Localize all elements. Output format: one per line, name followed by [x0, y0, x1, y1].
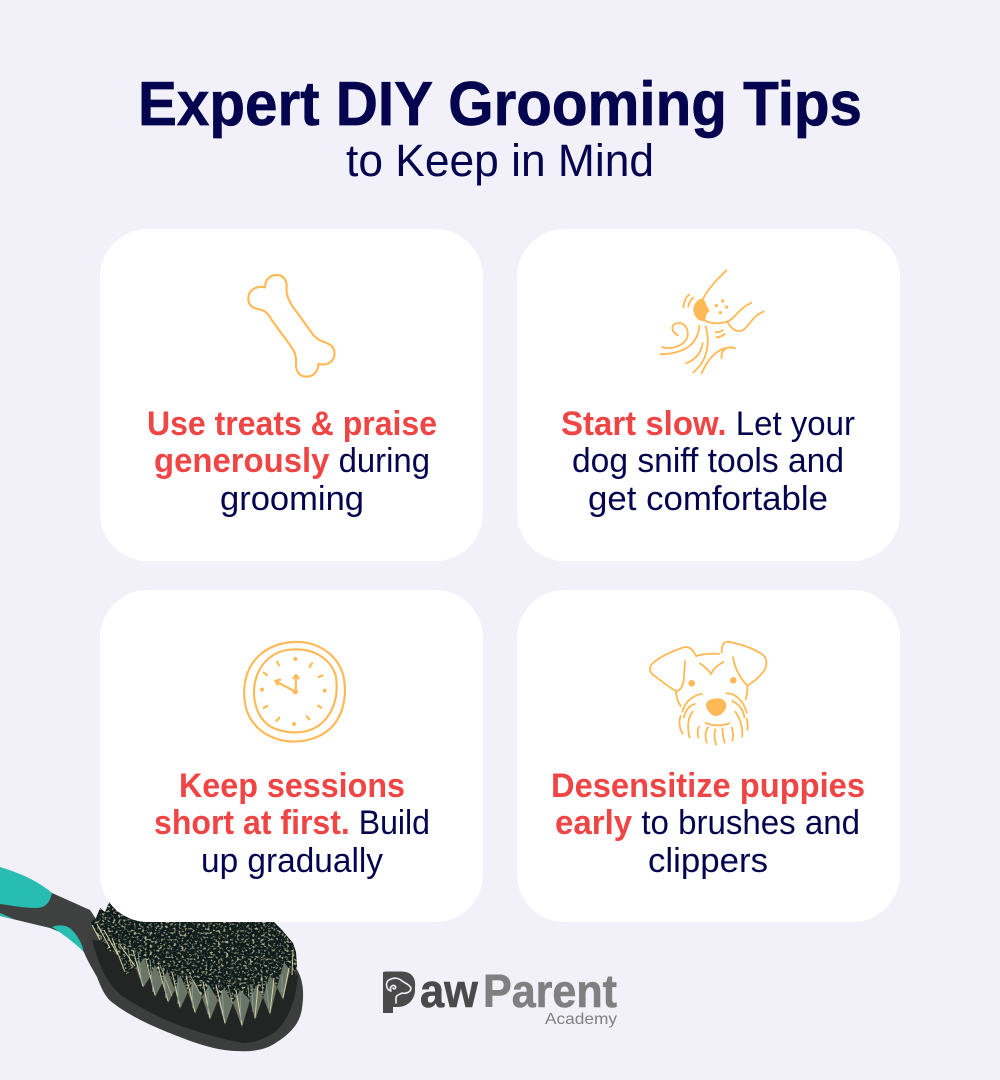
- tip text: start slow: get comfortable: [588, 480, 828, 518]
- logo: Paw Parent Academy: Academy: [545, 1011, 617, 1028]
- tip text: desensitize: clippers: [648, 842, 768, 880]
- title: to Keep in Mind: [346, 135, 654, 186]
- tip text: desensitize: early to brushes and: [555, 804, 860, 842]
- tip text: start slow: [561, 405, 855, 518]
- tip text: treats: grooming: [220, 480, 364, 518]
- icon: terrier dog face: [650, 642, 766, 745]
- icon: dog nose sniffing: [660, 270, 764, 373]
- tip text: short sessions: [154, 767, 430, 880]
- tip text: treats: generously during: [154, 442, 430, 480]
- title: Expert DIY Grooming Tips: [138, 70, 862, 139]
- tip text: desensitize: [551, 767, 865, 880]
- tip text: short sessions: short at first. Build: [154, 804, 430, 842]
- logo: Paw Parent Academy: [381, 959, 617, 1028]
- icon: bone: [248, 275, 334, 377]
- icon: clock: [244, 642, 345, 742]
- tip text: treats: [147, 405, 437, 518]
- logo: Paw Parent Academy: P: [381, 959, 417, 1026]
- tip text: desensitize: Desensitize puppies: [551, 767, 865, 805]
- logo: Paw Parent Academy: aw: [420, 964, 478, 1017]
- panel: desensitize puppies: [517, 590, 900, 922]
- panel: treats and praise: [100, 229, 483, 561]
- title: [138, 70, 862, 186]
- tip text: treats: Use treats & praise: [147, 405, 437, 443]
- tip text: short sessions: up gradually: [201, 842, 383, 880]
- panel: short sessions: [100, 590, 483, 922]
- logo: Paw Parent Academy: Parent: [483, 965, 617, 1017]
- tip text: start slow: dog sniff tools and: [572, 442, 844, 480]
- brush photo illustration: [0, 867, 303, 1051]
- tip text: short sessions: Keep sessions: [179, 767, 405, 805]
- tip text: start slow: Start slow. Let your: [561, 405, 855, 443]
- panel: start slow: [517, 229, 900, 561]
